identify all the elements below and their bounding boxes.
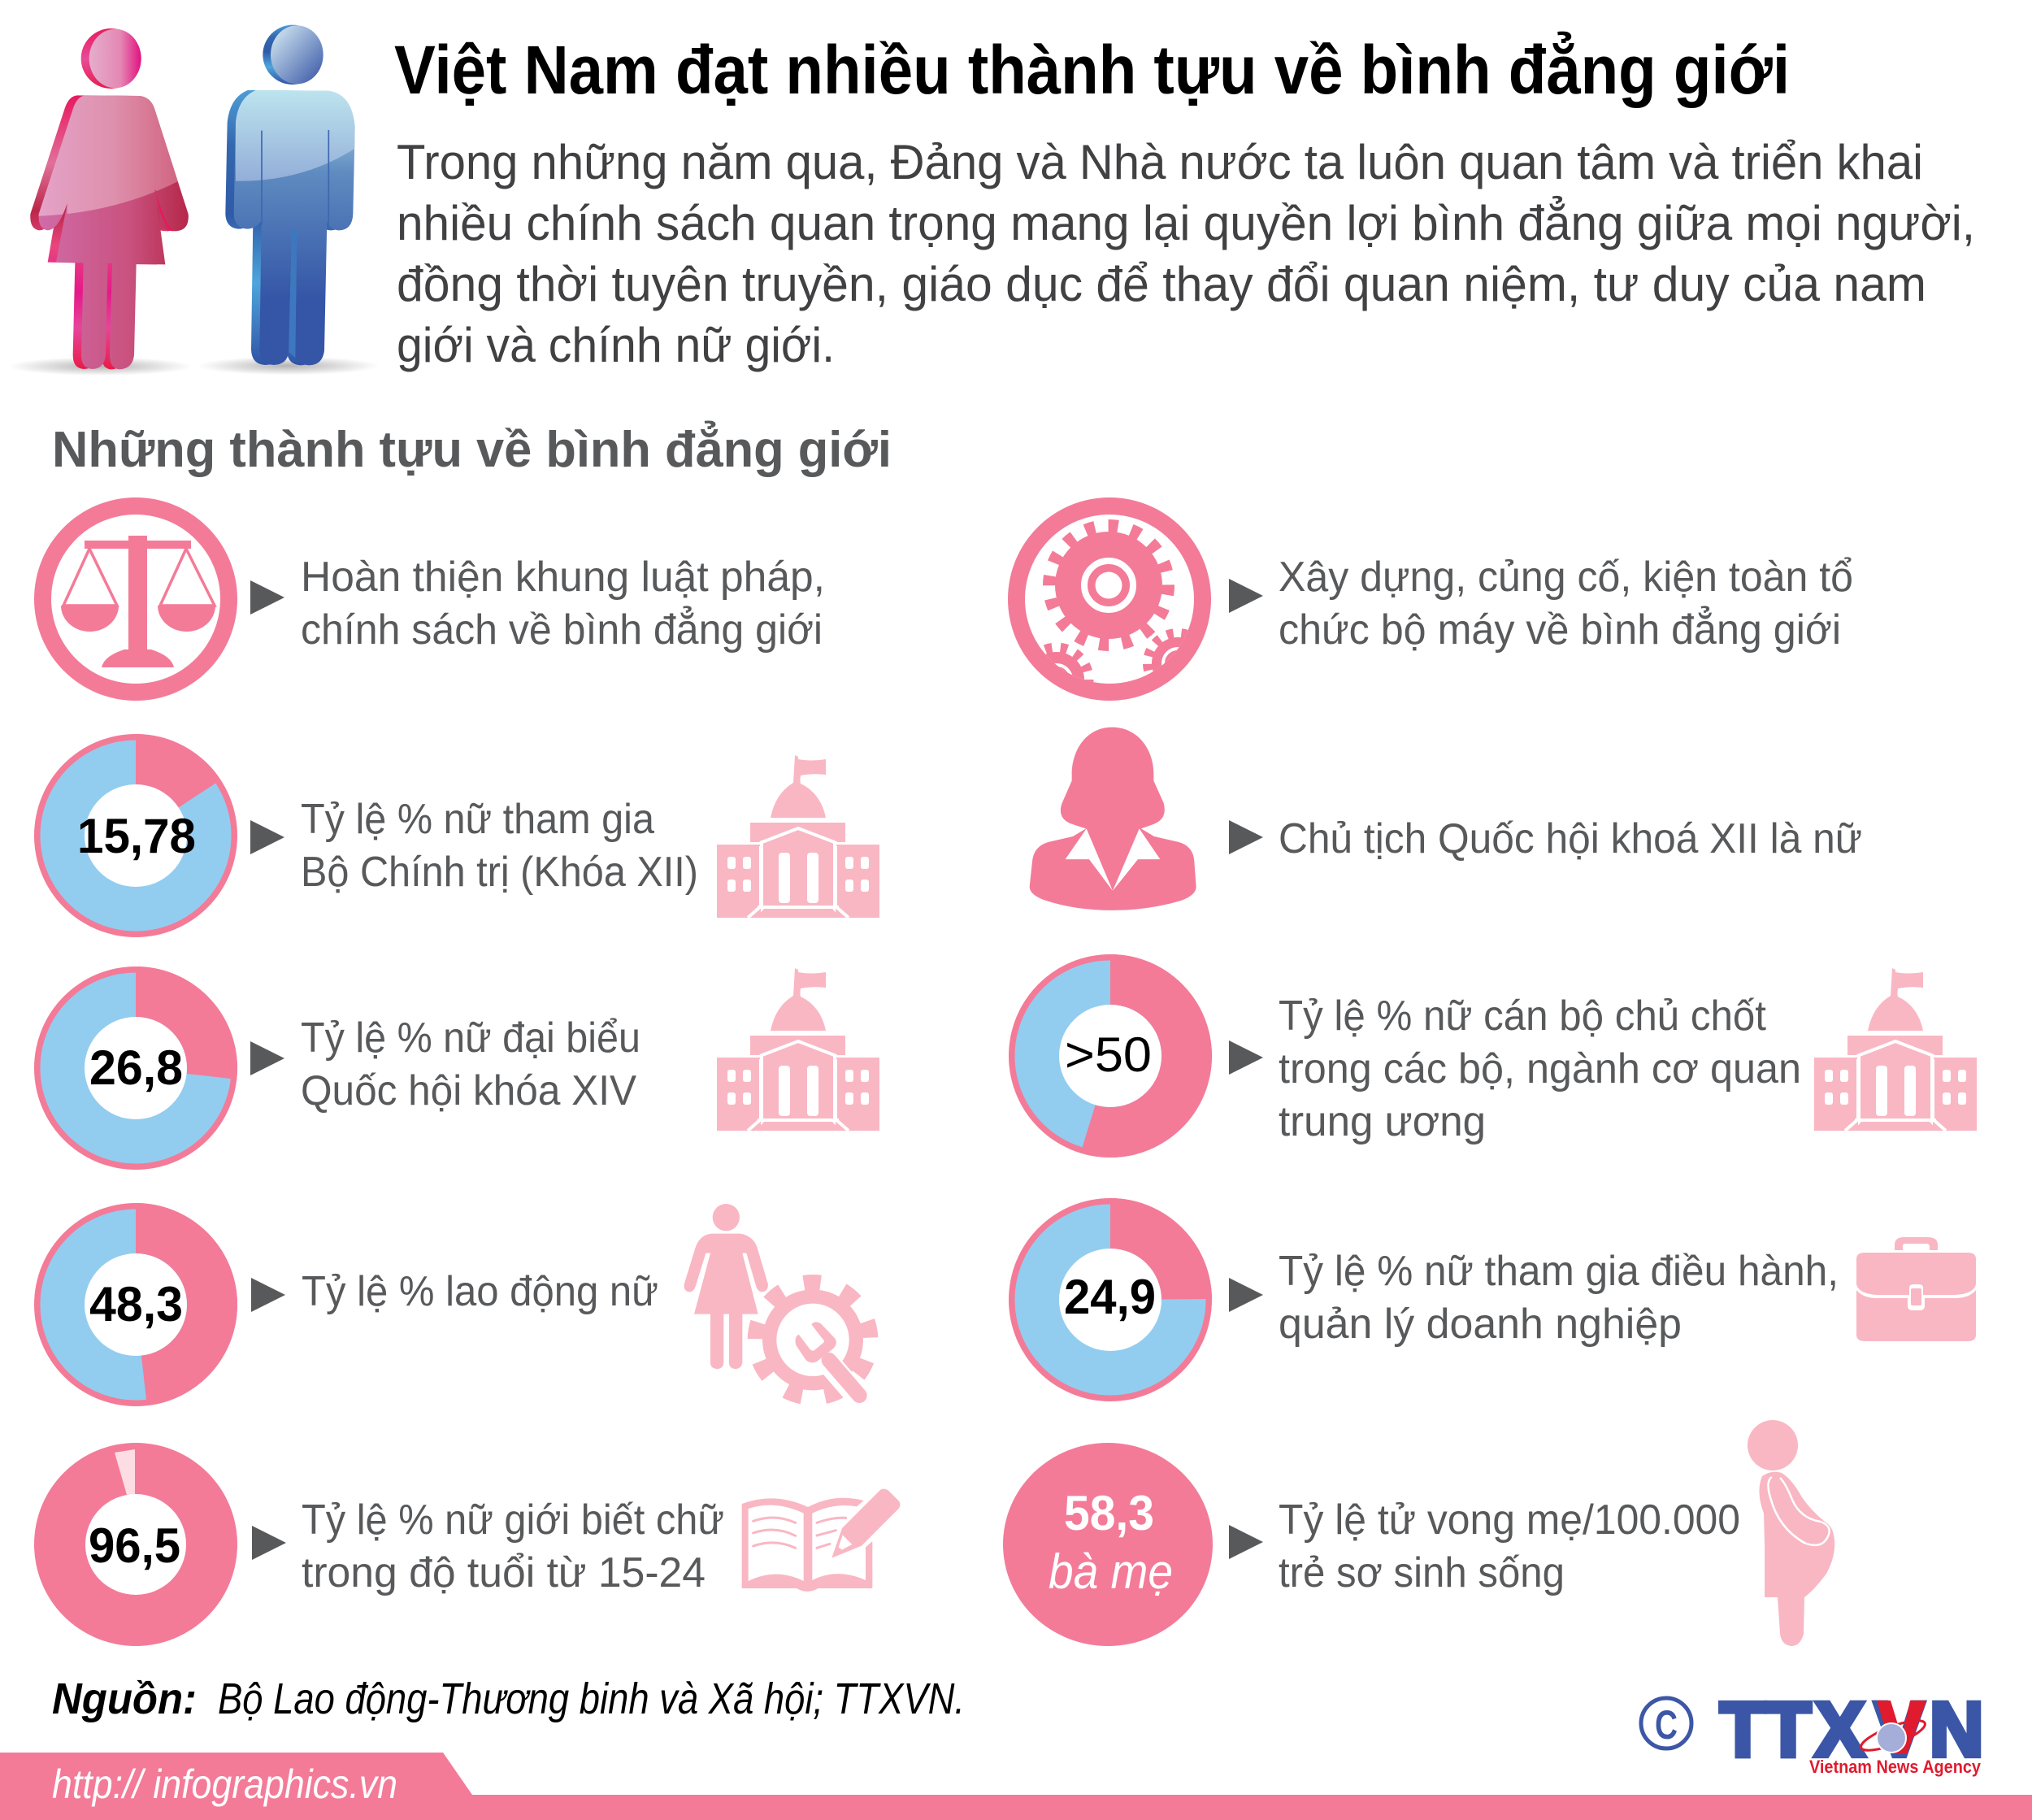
stat circle: 58,3 bà mẹ: 58,3 <box>1064 1486 1154 1540</box>
icon: woman bust <box>1030 728 1196 910</box>
text: chức bộ máy về bình đẳng giới <box>1279 606 1841 654</box>
text: Tỷ lệ % nữ giới biết chữ <box>302 1496 724 1544</box>
donut: 24,9: 24,9 <box>1064 1270 1156 1324</box>
arrow <box>251 1278 285 1312</box>
text <box>302 1496 724 1596</box>
arrow <box>1229 579 1263 613</box>
arrow <box>1229 1278 1263 1312</box>
intro paragraph: nhiều chính sách quan trọng mang lại quyền lợi bình đẳng giữa mọi người, <box>397 196 1975 250</box>
text: Xây dựng, củng cố, kiện toàn tổ <box>1279 554 1853 601</box>
source: Nguồn: <box>52 1674 197 1723</box>
panel: national assembly chair <box>1030 728 1862 910</box>
title: Việt Nam đạt nhiều thành tựu về bình đẳng giới <box>394 32 1790 108</box>
text <box>1279 993 1801 1145</box>
panel: business leaders <box>1009 1198 1976 1401</box>
donut: 48,3: 48,3 <box>89 1277 183 1331</box>
icon: briefcase <box>1856 1237 1976 1341</box>
illustration: woman and man figures <box>8 25 380 376</box>
text <box>1279 1248 1839 1348</box>
icon: gears in ring <box>1008 497 1211 711</box>
text <box>301 1014 640 1114</box>
shadow: man <box>198 357 380 375</box>
stat circle: 58,3 bà mẹ: bà mẹ <box>1049 1544 1173 1599</box>
donut: 48,3 <box>34 1203 237 1406</box>
donut: 15,78 <box>34 734 237 937</box>
donut: 26,8: 26,8 <box>89 1040 183 1095</box>
text: Tỷ lệ tử vong mẹ/100.000 <box>1279 1496 1740 1544</box>
shadow: woman <box>8 357 193 376</box>
text: chính sách về bình đẳng giới <box>301 606 823 654</box>
text: Chủ tịch Quốc hội khoá XII là nữ <box>1279 815 1862 862</box>
text: Tỷ lệ % nữ đại biểu <box>301 1014 640 1062</box>
arrow <box>1229 820 1263 854</box>
logo: TTXVN: TTXVN <box>1720 1686 1983 1772</box>
icon: building <box>717 968 879 1131</box>
logo: copyright: C <box>1655 1702 1678 1748</box>
icon: pregnant woman <box>1748 1420 1834 1646</box>
arrow <box>250 820 284 854</box>
text: trong các bộ, ngành cơ quan <box>1279 1045 1801 1092</box>
figure: woman <box>30 28 189 369</box>
icon: scales in ring <box>34 497 237 701</box>
intro paragraph: Trong những năm qua, Đảng và Nhà nước ta luôn quan tâm và triển khai <box>397 135 1923 189</box>
logo: TTXVN: Vietnam News Agency <box>1809 1757 1982 1777</box>
donut: >50 <box>1009 954 1212 1158</box>
donut: 96,5: 96,5 <box>89 1518 180 1573</box>
text: Tỷ lệ % nữ tham gia <box>301 796 654 843</box>
arrow <box>1229 1040 1263 1075</box>
text: trung ương <box>1279 1098 1486 1145</box>
text: Tỷ lệ % lao động nữ <box>302 1268 658 1315</box>
figure: man <box>225 25 355 365</box>
text: trẻ sơ sinh sống <box>1279 1549 1565 1596</box>
panel: organisation <box>1008 497 1853 711</box>
text <box>1279 554 1853 654</box>
big gear <box>1049 526 1168 645</box>
logo: copyright <box>1641 1698 1691 1748</box>
small gears <box>1044 628 1188 682</box>
source: Bộ Lao động-Thương binh và Xã hội; TTXVN. <box>218 1674 965 1723</box>
panel: legal framework <box>34 497 825 701</box>
arrow <box>252 1526 286 1560</box>
panel: female workers <box>34 1203 876 1406</box>
text <box>301 796 698 896</box>
text: Hoàn thiện khung luật pháp, <box>301 554 825 601</box>
arrow <box>1229 1525 1263 1559</box>
text: Quốc hội khóa XIV <box>301 1067 636 1114</box>
donut: 24,9 <box>1009 1198 1212 1401</box>
intro paragraph: đồng thời tuyên truyền, giáo dục để thay đổi quan niệm, tư duy của nam <box>397 257 1926 311</box>
icon: building <box>717 755 879 918</box>
donut: 96,5 <box>34 1443 237 1646</box>
text: Tỷ lệ % nữ cán bộ chủ chốt <box>1279 993 1767 1040</box>
arrow <box>250 1041 284 1075</box>
icon: building <box>1814 968 1977 1131</box>
icon: book and pencil <box>742 1489 900 1592</box>
stat circle: 58,3 bà mẹ <box>1003 1443 1213 1646</box>
website url: http:// infographics.vn <box>52 1761 397 1807</box>
text: Tỷ lệ % nữ tham gia điều hành, <box>1279 1248 1839 1295</box>
panel: key officials <box>1009 954 1977 1158</box>
text: trong độ tuổi từ 15-24 <box>302 1549 706 1596</box>
footer bar <box>0 1753 2032 1820</box>
panel: politburo share <box>34 734 879 937</box>
donut: 26,8 <box>34 966 237 1170</box>
text: Bộ Chính trị (Khóa XII) <box>301 849 698 896</box>
text <box>301 554 825 654</box>
donut: >50: >50 <box>1065 1027 1152 1082</box>
icon: woman and gear <box>684 1204 876 1404</box>
panel: maternal mortality <box>1003 1420 1834 1646</box>
panel: national assembly delegates <box>34 966 879 1170</box>
text: quản lý doanh nghiệp <box>1279 1301 1682 1348</box>
section heading: Những thành tựu về bình đẳng giới <box>52 421 892 478</box>
arrow <box>250 580 284 615</box>
intro paragraph: giới và chính nữ giới. <box>397 318 835 372</box>
text <box>1279 1496 1740 1596</box>
intro paragraph <box>397 135 1975 372</box>
panel: literacy <box>34 1443 900 1646</box>
donut: 15,78: 15,78 <box>77 809 196 863</box>
